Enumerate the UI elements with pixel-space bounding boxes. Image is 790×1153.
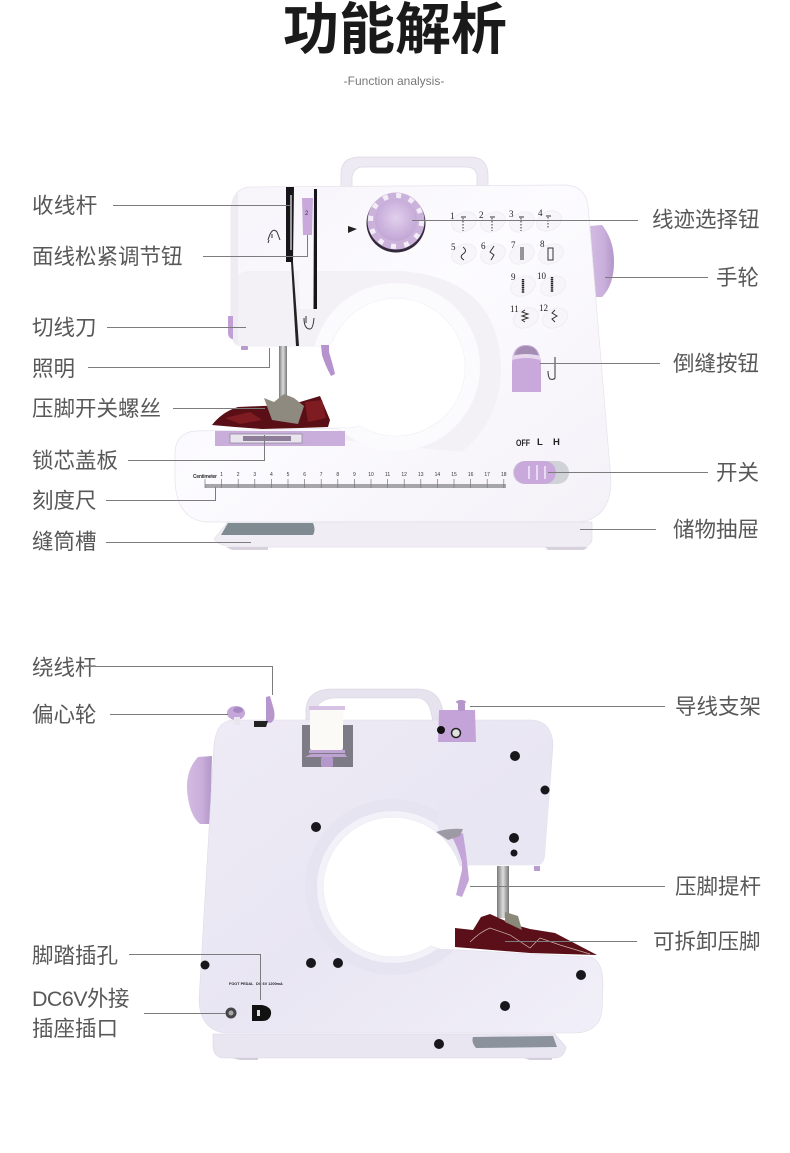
label: DC 6V socket [32,987,226,1041]
hand wheel [590,225,614,297]
label: reverse button: 倒缝按钮 [673,352,759,376]
label: thread guide: 导线支架 [675,695,761,719]
ruler: 17 [484,472,490,478]
label: presser foot screw: 压脚开关螺丝 [32,397,161,421]
machine feet [232,1058,552,1060]
label: bobbin slot: 缝筒槽 [32,530,97,554]
port labels: FOOT PEDAL [229,982,254,986]
ruler: 13 [418,472,424,478]
label: DC 6V socket: 插座插口 [32,1017,118,1041]
ruler: Centimeter [193,474,217,480]
ruler: 16 [468,472,474,478]
DC power socket [252,1005,271,1021]
label: bobbin winder: 绕线杆 [32,656,97,680]
bobbin winder post [266,696,274,723]
ruler: 10 [368,472,374,478]
ruler: 6 [303,472,306,478]
label: ruler [32,487,216,513]
stitch pattern buttons: 11 [510,304,519,314]
stitch pattern buttons [448,207,571,332]
carry handle [341,157,488,188]
label: upper tension knob: 面线松紧调节钮 [32,245,183,269]
fabric [212,396,330,429]
sewing machine back view [187,689,603,1060]
stitch pattern buttons: 10 [537,271,546,281]
stitch pattern buttons: 5 [451,242,456,252]
stitch pattern buttons: 1 [450,211,454,221]
label: stitch selector: 线迹选择钮 [652,208,760,232]
reverse stitch button [512,345,555,392]
accessory slot [221,523,314,535]
label: presser foot lever: 压脚提杆 [675,875,761,899]
storage drawer [214,522,592,547]
presser foot [264,394,304,424]
ruler: 4 [270,472,273,478]
machine body [175,185,611,522]
label: hand wheel: 手轮 [716,266,759,290]
label: DC 6V socket: DC6V外接 [32,987,129,1011]
power switch: H [553,437,560,448]
ruler: 1 [220,472,223,478]
stitch pattern buttons: 4 [538,208,543,218]
label: upper tension knob [32,235,308,269]
label: eccentric wheel: 偏心轮 [32,703,97,727]
label: bobbin cover [32,435,264,473]
stitch pattern buttons: 3 [509,209,514,219]
screw holes [200,751,586,1049]
thread recess [302,725,353,767]
light knob [241,346,248,350]
label: bobbin cover: 锁芯盖板 [32,449,118,473]
head shaded band and opening ring [232,193,489,436]
needle bar [497,866,509,918]
presser foot lever [321,345,335,376]
ruler: 11 [385,472,390,478]
ruler: 3 [253,472,256,478]
label: storage drawer: 储物抽屉 [673,518,759,542]
presser foot lift lever [452,833,469,897]
thread spool [305,706,347,767]
label: power switch: 开关 [716,461,759,485]
ruler: 15 [451,472,457,478]
stitch selector dial [366,192,426,252]
small foot knob [534,866,540,871]
stitch pattern buttons: 8 [540,239,545,249]
thread take-up channel: 2 [305,211,309,217]
label: removable presser foot: 可拆卸压脚 [653,930,761,954]
fabric with stitching [455,912,597,955]
drawer slot [472,1036,557,1048]
label: foot pedal jack [32,944,260,1000]
label: lighting: 照明 [32,357,75,381]
ruler: 14 [435,472,440,478]
ruler: 7 [320,472,323,478]
small thread cutter [228,316,233,339]
ruler: 18 [501,472,507,478]
drawer [213,1034,566,1058]
hand wheel [187,756,212,824]
machine body [199,720,603,1033]
arrow marker [348,226,357,233]
foot pedal socket [226,1008,236,1018]
stitch pattern buttons: 2 [479,210,484,220]
subtitle: -Function analysis- [344,74,444,88]
port labels: DC 6V 1200mA [256,982,283,986]
eccentric wheel [227,706,268,727]
thread path icon [268,230,280,243]
carry handle [306,689,443,722]
ruler [193,472,507,488]
ruler: 12 [401,472,407,478]
ruler: 2 [237,472,240,478]
power switch: L [537,437,543,448]
stitch pattern buttons: 12 [539,303,548,313]
stitch pattern buttons: 7 [511,240,516,250]
machine feet [226,547,588,550]
label: foot pedal jack: 脚踏插孔 [32,944,118,968]
ruler: 5 [287,472,290,478]
needle bar [279,346,287,402]
label: thread take-up lever: 收线杆 [32,194,98,218]
label: ruler: 刻度尺 [32,489,97,513]
stitch pattern buttons: 9 [511,272,516,282]
bobbin cover plate [215,431,345,446]
ruler: 9 [353,472,356,478]
power switch: OFF [516,438,530,449]
thread take-up channel [286,187,317,346]
label: thread cutter: 切线刀 [32,316,97,340]
label: bobbin winder [32,656,272,695]
thread guide bracket [437,700,476,742]
port labels [229,982,283,986]
label: lighting [32,348,270,381]
opening ring [317,811,462,963]
sewing machine front view [175,157,614,550]
ruler: 8 [336,472,339,478]
power switch [513,437,569,484]
stitch pattern buttons: 6 [481,241,486,251]
